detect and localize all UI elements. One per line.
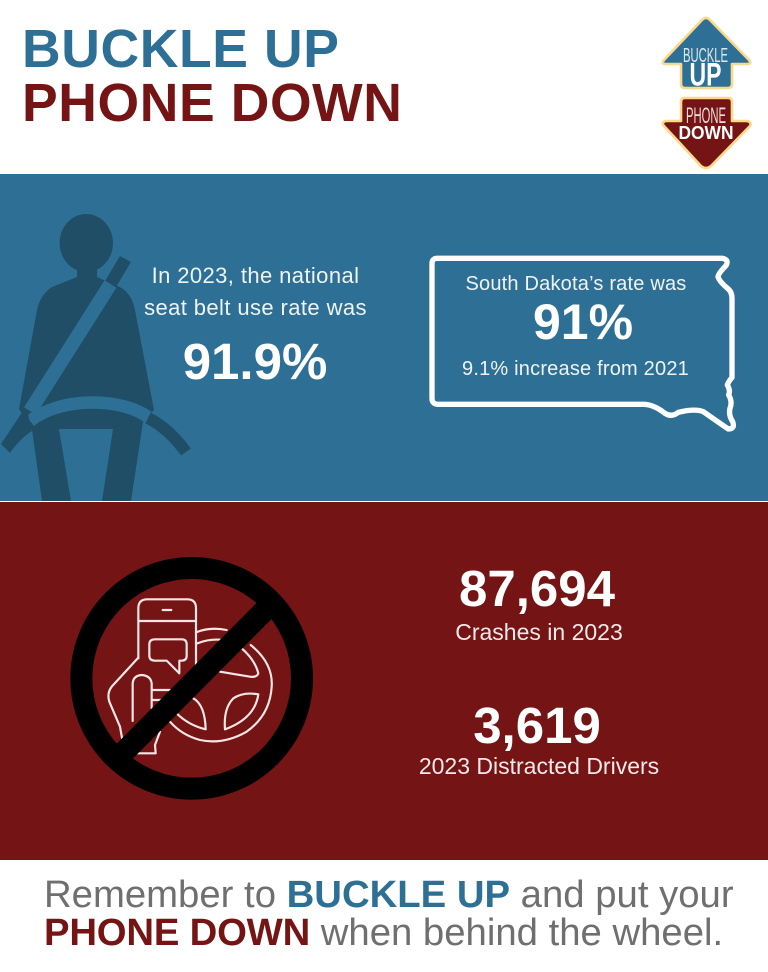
icon: buckle up phone down arrows logo: BUCKLE [683, 44, 728, 67]
stat: crashes [455, 560, 623, 645]
stat: distracted drivers: 3,619 [473, 697, 601, 754]
stat: crashes: Crashes in 2023 [455, 619, 623, 645]
closing message: PHONE DOWN when behind the wheel. [44, 911, 723, 954]
text: South Dakota rate: South Dakota’s rate was [465, 273, 687, 295]
panel: distracted driving [0, 502, 768, 860]
icon: driver wearing seat belt [1, 214, 191, 501]
icon: no phone while driving [70, 557, 313, 800]
icon: buckle up phone down arrows logo [662, 16, 752, 170]
text: South Dakota rate [462, 273, 689, 380]
icon: buckle up phone down arrows logo: PHONE [686, 103, 726, 128]
closing message [44, 873, 734, 954]
text: national rate: 91.9% [183, 333, 327, 390]
title: BUCKLE UP [22, 20, 340, 79]
text: national rate: In 2023, the national [152, 263, 359, 288]
text: national rate [144, 263, 367, 390]
title: PHONE DOWN [22, 74, 402, 133]
stat: distracted drivers: 2023 Distracted Drivers [419, 753, 659, 779]
title [22, 20, 402, 133]
icon: buckle up phone down arrows logo: UP [690, 56, 722, 92]
icon: South Dakota outline [429, 256, 736, 432]
stat: crashes: 87,694 [459, 560, 615, 617]
text: South Dakota rate: 91% [533, 294, 633, 350]
stat: distracted drivers [419, 697, 659, 779]
closing message: Remember to BUCKLE UP and put your [44, 873, 734, 916]
text: South Dakota rate: 9.1% increase from 2021 [462, 358, 689, 380]
text: national rate: seat belt use rate was [144, 295, 367, 320]
icon: buckle up phone down arrows logo: DOWN [678, 122, 734, 143]
panel: seat belt [0, 174, 768, 501]
